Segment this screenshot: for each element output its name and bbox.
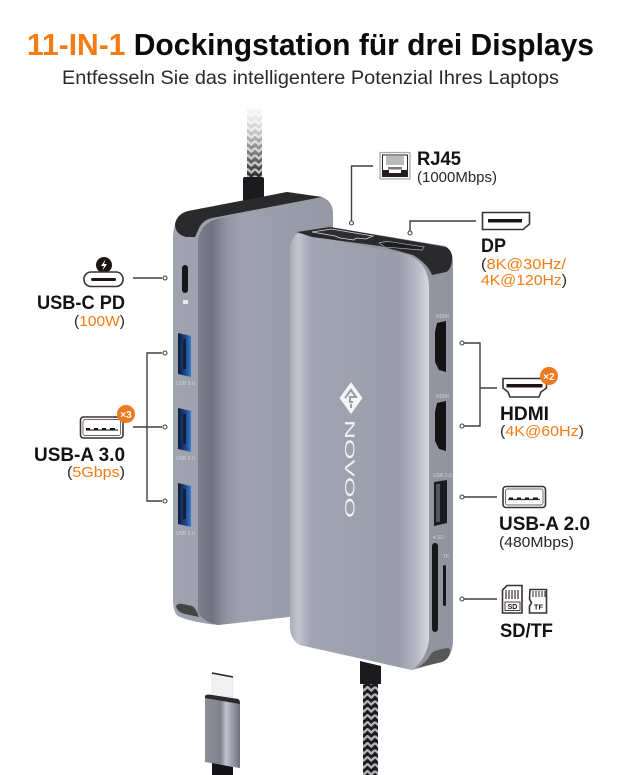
callout: DP: (8K@30Hz/ bbox=[481, 256, 567, 273]
port: USB 2.0 bbox=[433, 473, 452, 526]
title: 11-IN-1 Dockingstation für drei Displays bbox=[27, 27, 594, 62]
port: USB 3.0 first: USB 3.0 bbox=[176, 381, 195, 387]
icon: USB-C with bolt bbox=[84, 257, 123, 286]
port: HDMI first bbox=[435, 314, 449, 372]
callout: USB-A 2.0 bbox=[460, 486, 590, 551]
port: USB 3.0 second bbox=[176, 408, 195, 462]
callout: DP: 4K@120Hz ) bbox=[481, 272, 567, 289]
port: SD slot bbox=[432, 535, 444, 632]
port: USB 3.0 third: USB 3.0 bbox=[176, 531, 195, 537]
subtitle: Entfesseln Sie das intelligentere Potenzial Ihres Laptops bbox=[62, 67, 559, 89]
callout: USB-A 3.0 bbox=[34, 351, 167, 503]
USB-C plug bbox=[205, 673, 240, 775]
brand name: NOVOO bbox=[342, 420, 358, 518]
port: RJ45 bbox=[312, 229, 373, 240]
icon: TF card: TF bbox=[534, 602, 543, 612]
callout: USB-A 2.0: USB-A 2.0 bbox=[499, 513, 590, 535]
callout: USB-A 3.0: (5Gbps) bbox=[67, 464, 125, 481]
port: TF slot bbox=[443, 554, 449, 606]
port: USB 2.0: USB 2.0 bbox=[433, 473, 452, 479]
logo bbox=[340, 382, 362, 518]
port: HDMI second bbox=[435, 394, 449, 451]
icon: DisplayPort bbox=[482, 212, 530, 230]
callout: USB-A 3.0: USB-A 3.0 bbox=[34, 444, 125, 466]
callout: HDMI bbox=[460, 341, 584, 440]
callout: USB-C PD: (100W) bbox=[74, 313, 125, 330]
dock: front unit bbox=[290, 227, 453, 670]
callout: USB-A 2.0: (480Mbps) bbox=[499, 534, 574, 551]
callout: SD/TF bbox=[460, 586, 553, 642]
rear unit bottom cap bbox=[176, 604, 199, 617]
top braided cable bbox=[243, 105, 264, 213]
icon: RJ45 bbox=[380, 152, 410, 179]
icon: USB-A x3 bbox=[80, 405, 135, 438]
callout: SD/TF: SD/TF bbox=[500, 620, 553, 642]
dock: rear unit bbox=[173, 192, 333, 625]
front unit bottom cap bbox=[417, 648, 450, 668]
port: HDMI second: HDMI bbox=[436, 394, 449, 400]
port: USB-C bbox=[182, 265, 188, 293]
icon: USB-A bbox=[503, 486, 546, 508]
icon: USB-A x3: ×3 bbox=[120, 410, 132, 421]
bottom braided cable bbox=[360, 661, 381, 775]
callout: RJ45: RJ45 bbox=[417, 148, 461, 170]
callout: USB-C PD: USB-C PD bbox=[37, 292, 125, 314]
callout: RJ45 bbox=[350, 148, 497, 225]
callout: DP bbox=[408, 212, 567, 289]
port: DisplayPort bbox=[379, 242, 424, 250]
port: TF slot: TF bbox=[443, 554, 449, 560]
callout: HDMI: (4K@60Hz ) bbox=[500, 423, 584, 440]
callout: USB-C PD bbox=[37, 257, 167, 330]
port: USB 3.0 second: USB 3.0 bbox=[176, 456, 195, 462]
rear unit black end cap bbox=[175, 192, 322, 237]
port: USB 3.0 first bbox=[176, 333, 195, 387]
callout: HDMI: HDMI bbox=[500, 403, 549, 425]
port: HDMI first: HDMI bbox=[436, 314, 449, 320]
front unit black end cap bbox=[297, 227, 452, 275]
icon: HDMI x2: ×2 bbox=[543, 372, 555, 383]
callout: RJ45: (1000Mbps) bbox=[417, 169, 497, 186]
port: USB 3.0 third bbox=[176, 483, 195, 537]
callout: DP: DP bbox=[481, 235, 506, 257]
icon: SD card: SD bbox=[508, 604, 517, 611]
icon: power on port bbox=[183, 300, 188, 304]
port: SD slot: ▾ SD bbox=[433, 535, 444, 541]
